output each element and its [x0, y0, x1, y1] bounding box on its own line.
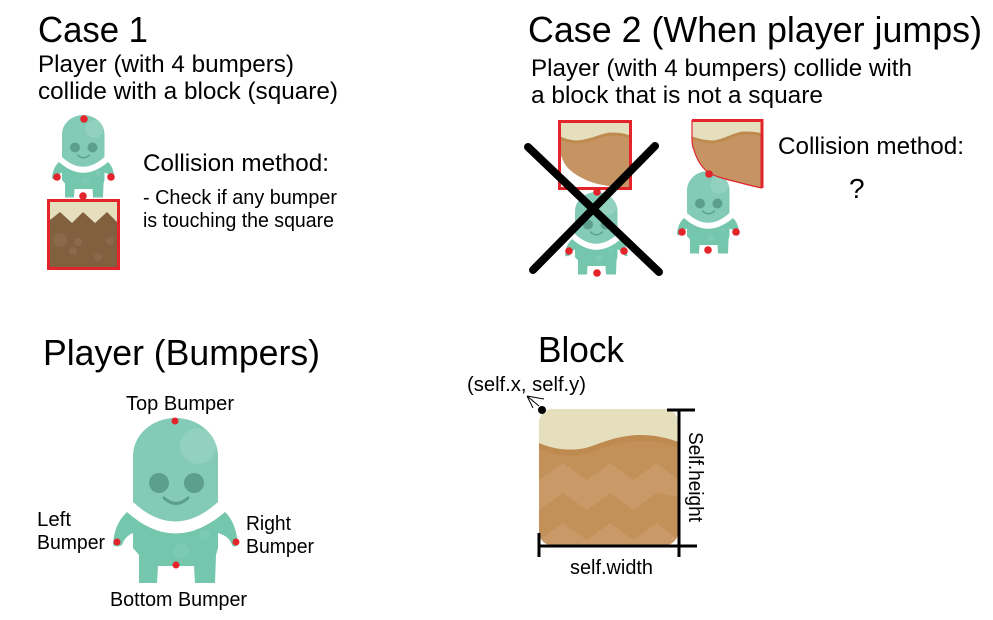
text: case 1 collision method: [143, 150, 337, 232]
icon: black cross: [528, 146, 659, 272]
text: case 2 description: Player (with 4 bumpers) collide with: [531, 55, 912, 82]
text: case 2 collision method: [778, 133, 964, 204]
icon: origin point with arrow: [527, 396, 546, 414]
label: self.x, self.y: (self.x, self.y): [467, 374, 586, 396]
heading: Case 1: Case 1: [38, 9, 148, 50]
block: curved tile with red outline: [692, 120, 762, 188]
text: case 2 collision method: Collision method:: [778, 133, 964, 160]
heading: Player (Bumpers): Player (Bumpers): [43, 332, 320, 373]
icon: crossed-out square collision: [528, 122, 659, 277]
label: top bumper: Top Bumper: [126, 393, 234, 415]
diagram: block dimensions: [467, 374, 706, 579]
block: square outline around curved tile: [560, 122, 630, 188]
label: right bumper: [246, 513, 314, 558]
text: case 2 description: [531, 55, 912, 109]
text: case 1 collision method: is touching the square: [143, 210, 334, 232]
text: case 1 collision method: Collision method:: [143, 150, 329, 177]
label: left bumper: Bumper: [37, 532, 105, 554]
label: bottom bumper: Bottom Bumper: [110, 589, 247, 611]
icon: player on square block: [48, 115, 118, 268]
dimension lines: [539, 410, 697, 557]
heading: Case 2: Case 2 (When player jumps): [528, 9, 982, 50]
label: left bumper: Left: [37, 509, 71, 531]
label: right bumper: Right: [246, 513, 291, 535]
label: self.height: Self.height: [684, 432, 706, 522]
icon: player touching curved block: [677, 120, 762, 254]
label: self.width: self.width: [570, 557, 653, 579]
text: case 1 collision method: - Check if any bumper: [143, 187, 337, 209]
text: case 1 description: collide with a block (square): [38, 78, 338, 105]
text: case 2 collision method: ?: [849, 173, 865, 204]
text: case 1 description: Player (with 4 bumpers): [38, 51, 294, 78]
label: left bumper: [37, 509, 105, 554]
text: case 2 description: a block that is not a square: [531, 82, 823, 109]
heading: Block: Block: [538, 329, 625, 370]
diagram: player bumpers: [37, 393, 314, 611]
label: right bumper: Bumper: [246, 536, 314, 558]
text: case 1 description: [38, 51, 338, 105]
block: square dirt tile: [48, 200, 118, 268]
